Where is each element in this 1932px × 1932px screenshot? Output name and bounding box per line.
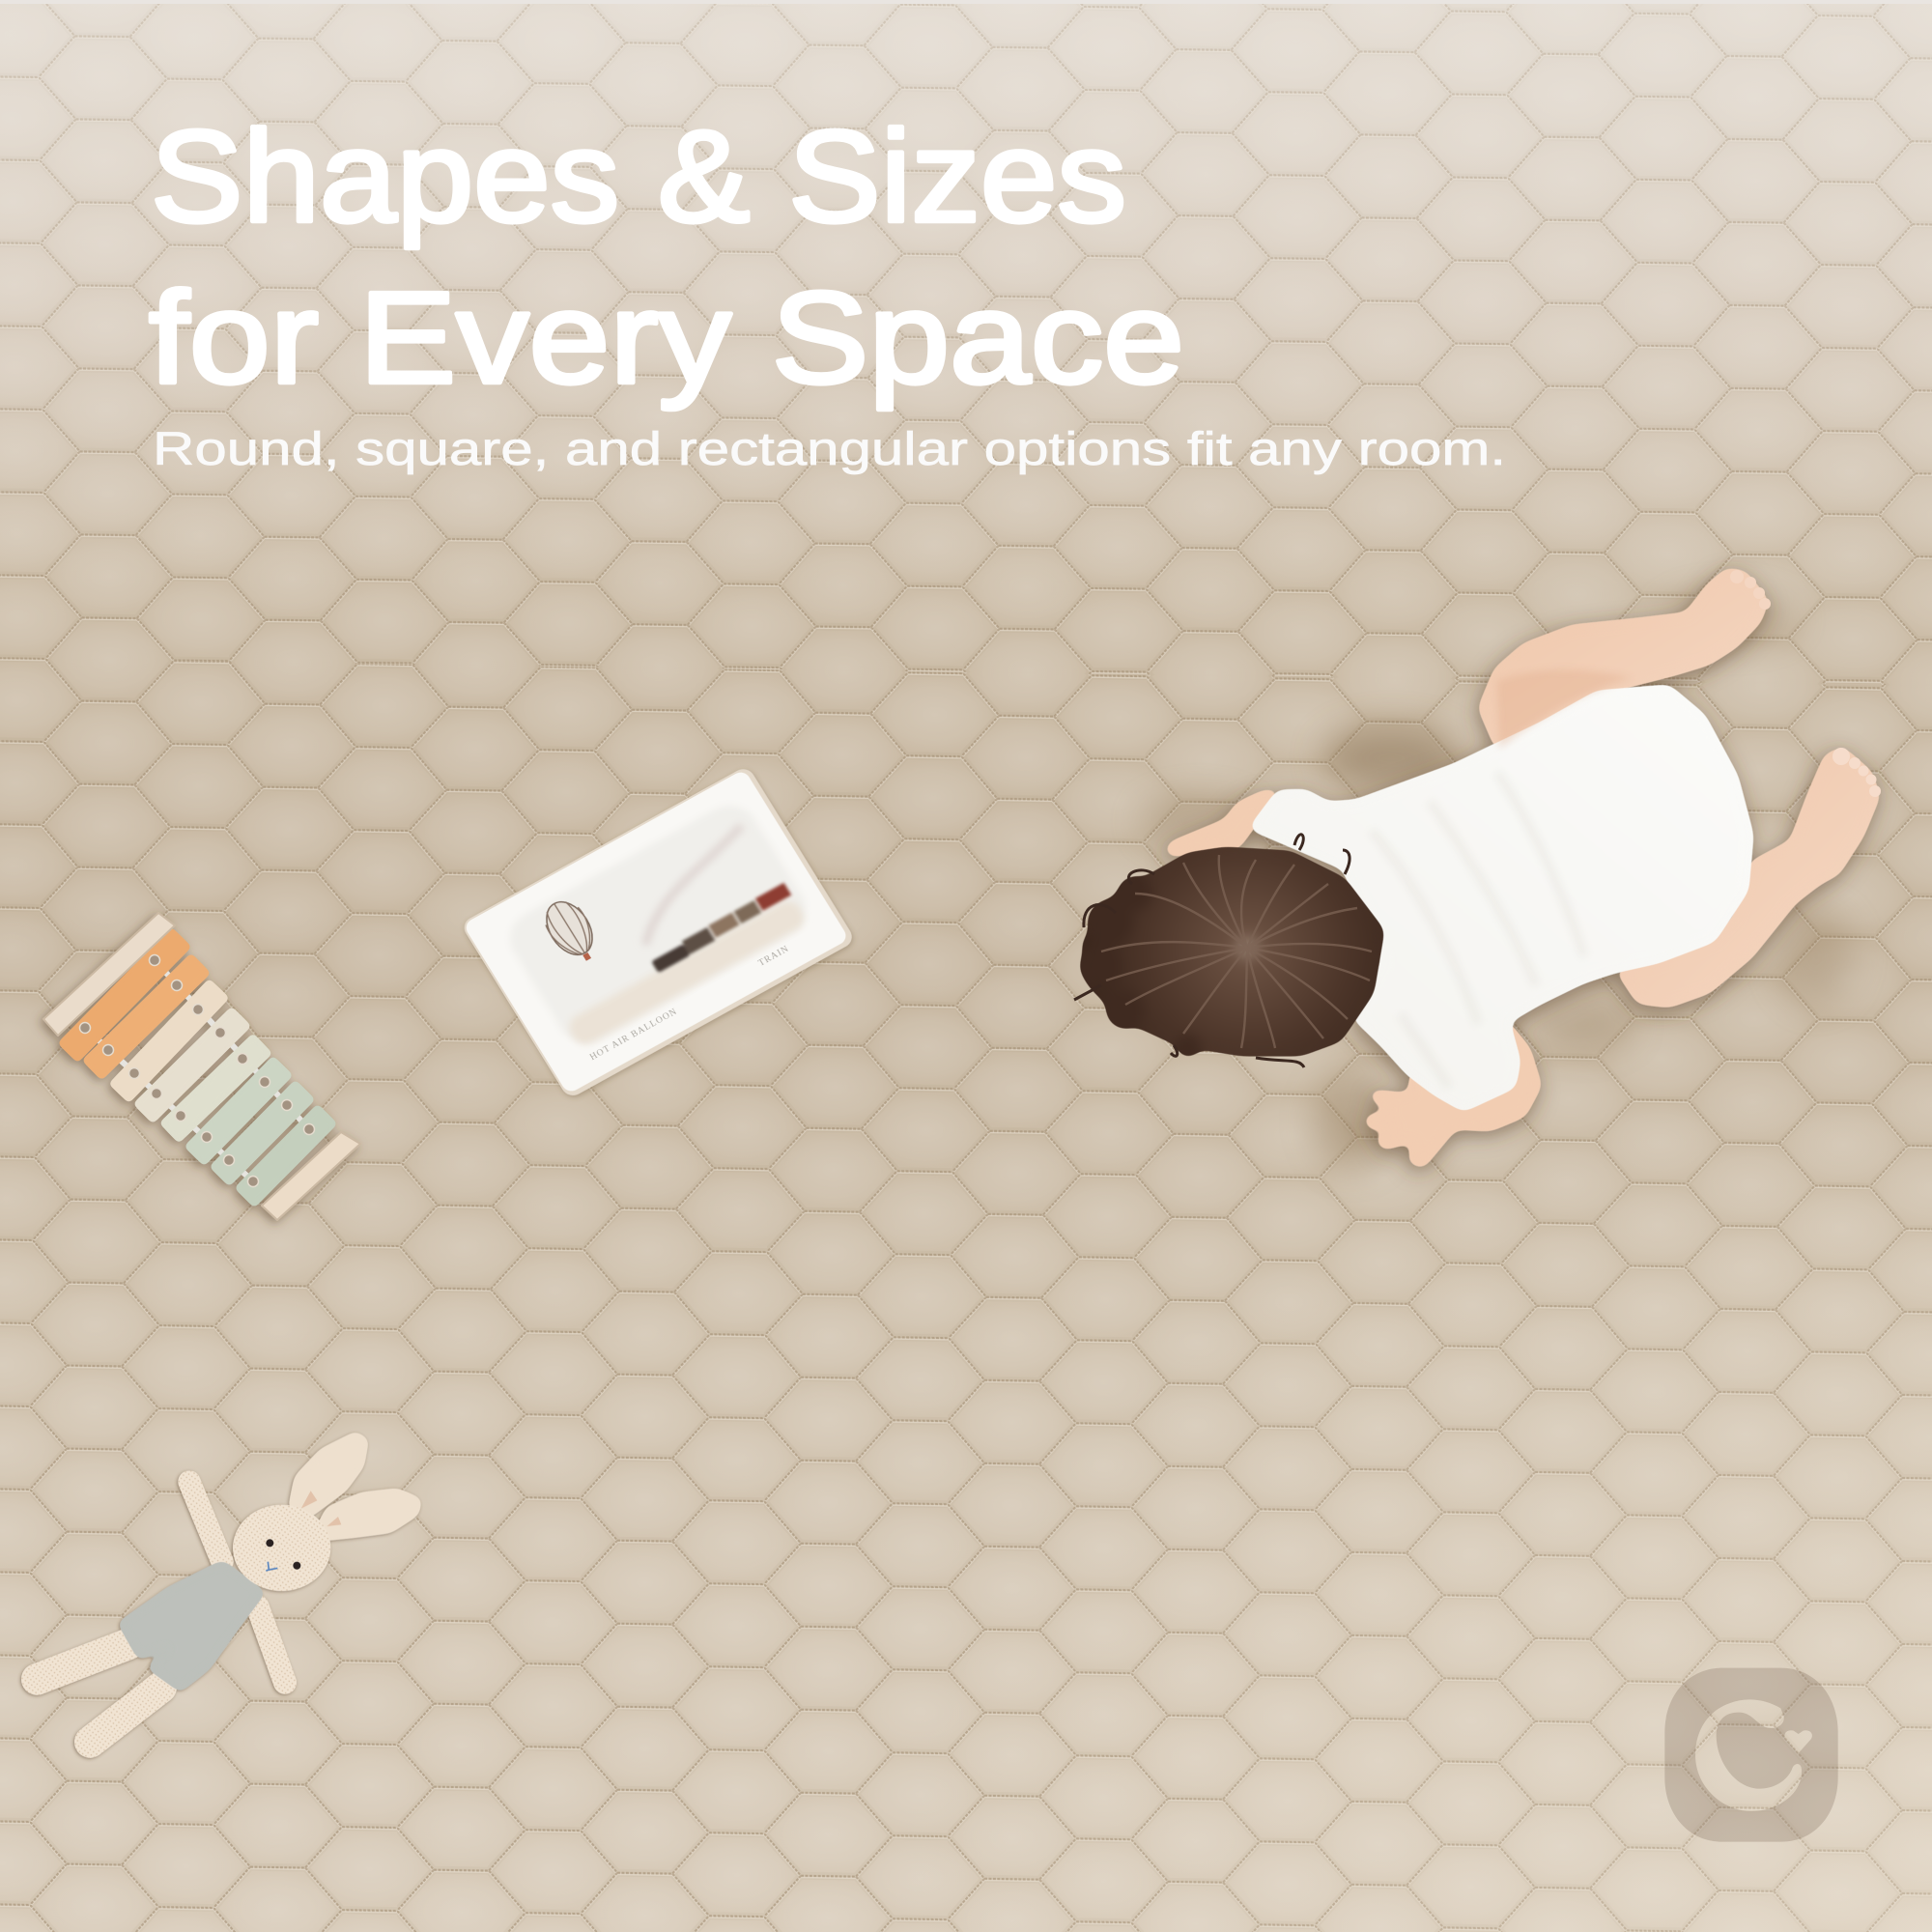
bars (68, 937, 327, 1198)
lower leg and foot (1615, 747, 1881, 1008)
left arm and hand (1164, 789, 1281, 857)
bunny ears (288, 1432, 422, 1541)
baby silhouette (1164, 568, 1881, 1169)
illustration: crawling baby (1074, 568, 1881, 1169)
label: hot air balloon: HOT AIR BALLOON (588, 1007, 679, 1063)
title (149, 103, 1184, 411)
illustration: crochet bunny (37, 1432, 422, 1742)
hair (1074, 835, 1384, 1067)
brand logo watermark (1664, 1668, 1838, 1842)
illustration: wooden xylophone (43, 913, 360, 1220)
title: Shapes & Sizes (151, 103, 1126, 249)
label: train: TRAIN (757, 944, 791, 969)
train (648, 883, 793, 973)
bunny face (266, 1539, 300, 1571)
watercolour scene (499, 796, 816, 1052)
bunny limbs (37, 1482, 285, 1742)
hot air balloon (537, 895, 606, 969)
bunny overalls (118, 1562, 266, 1692)
book page (460, 765, 856, 1099)
bunny head (233, 1505, 330, 1591)
white onesie (1248, 685, 1753, 1112)
title: for Every Space (149, 265, 1184, 411)
right arm and hand (1364, 1020, 1542, 1169)
illustration: picture book (460, 765, 856, 1099)
rails (85, 960, 309, 1181)
onesie fold shading (1372, 773, 1584, 1087)
wooden end rails (43, 913, 175, 1036)
subtitle: Round, square, and rectangular options fit any room. (153, 424, 1506, 475)
leg skin crease shading (1497, 669, 1633, 749)
upper leg and foot (1478, 568, 1771, 751)
rivets (79, 954, 315, 1186)
